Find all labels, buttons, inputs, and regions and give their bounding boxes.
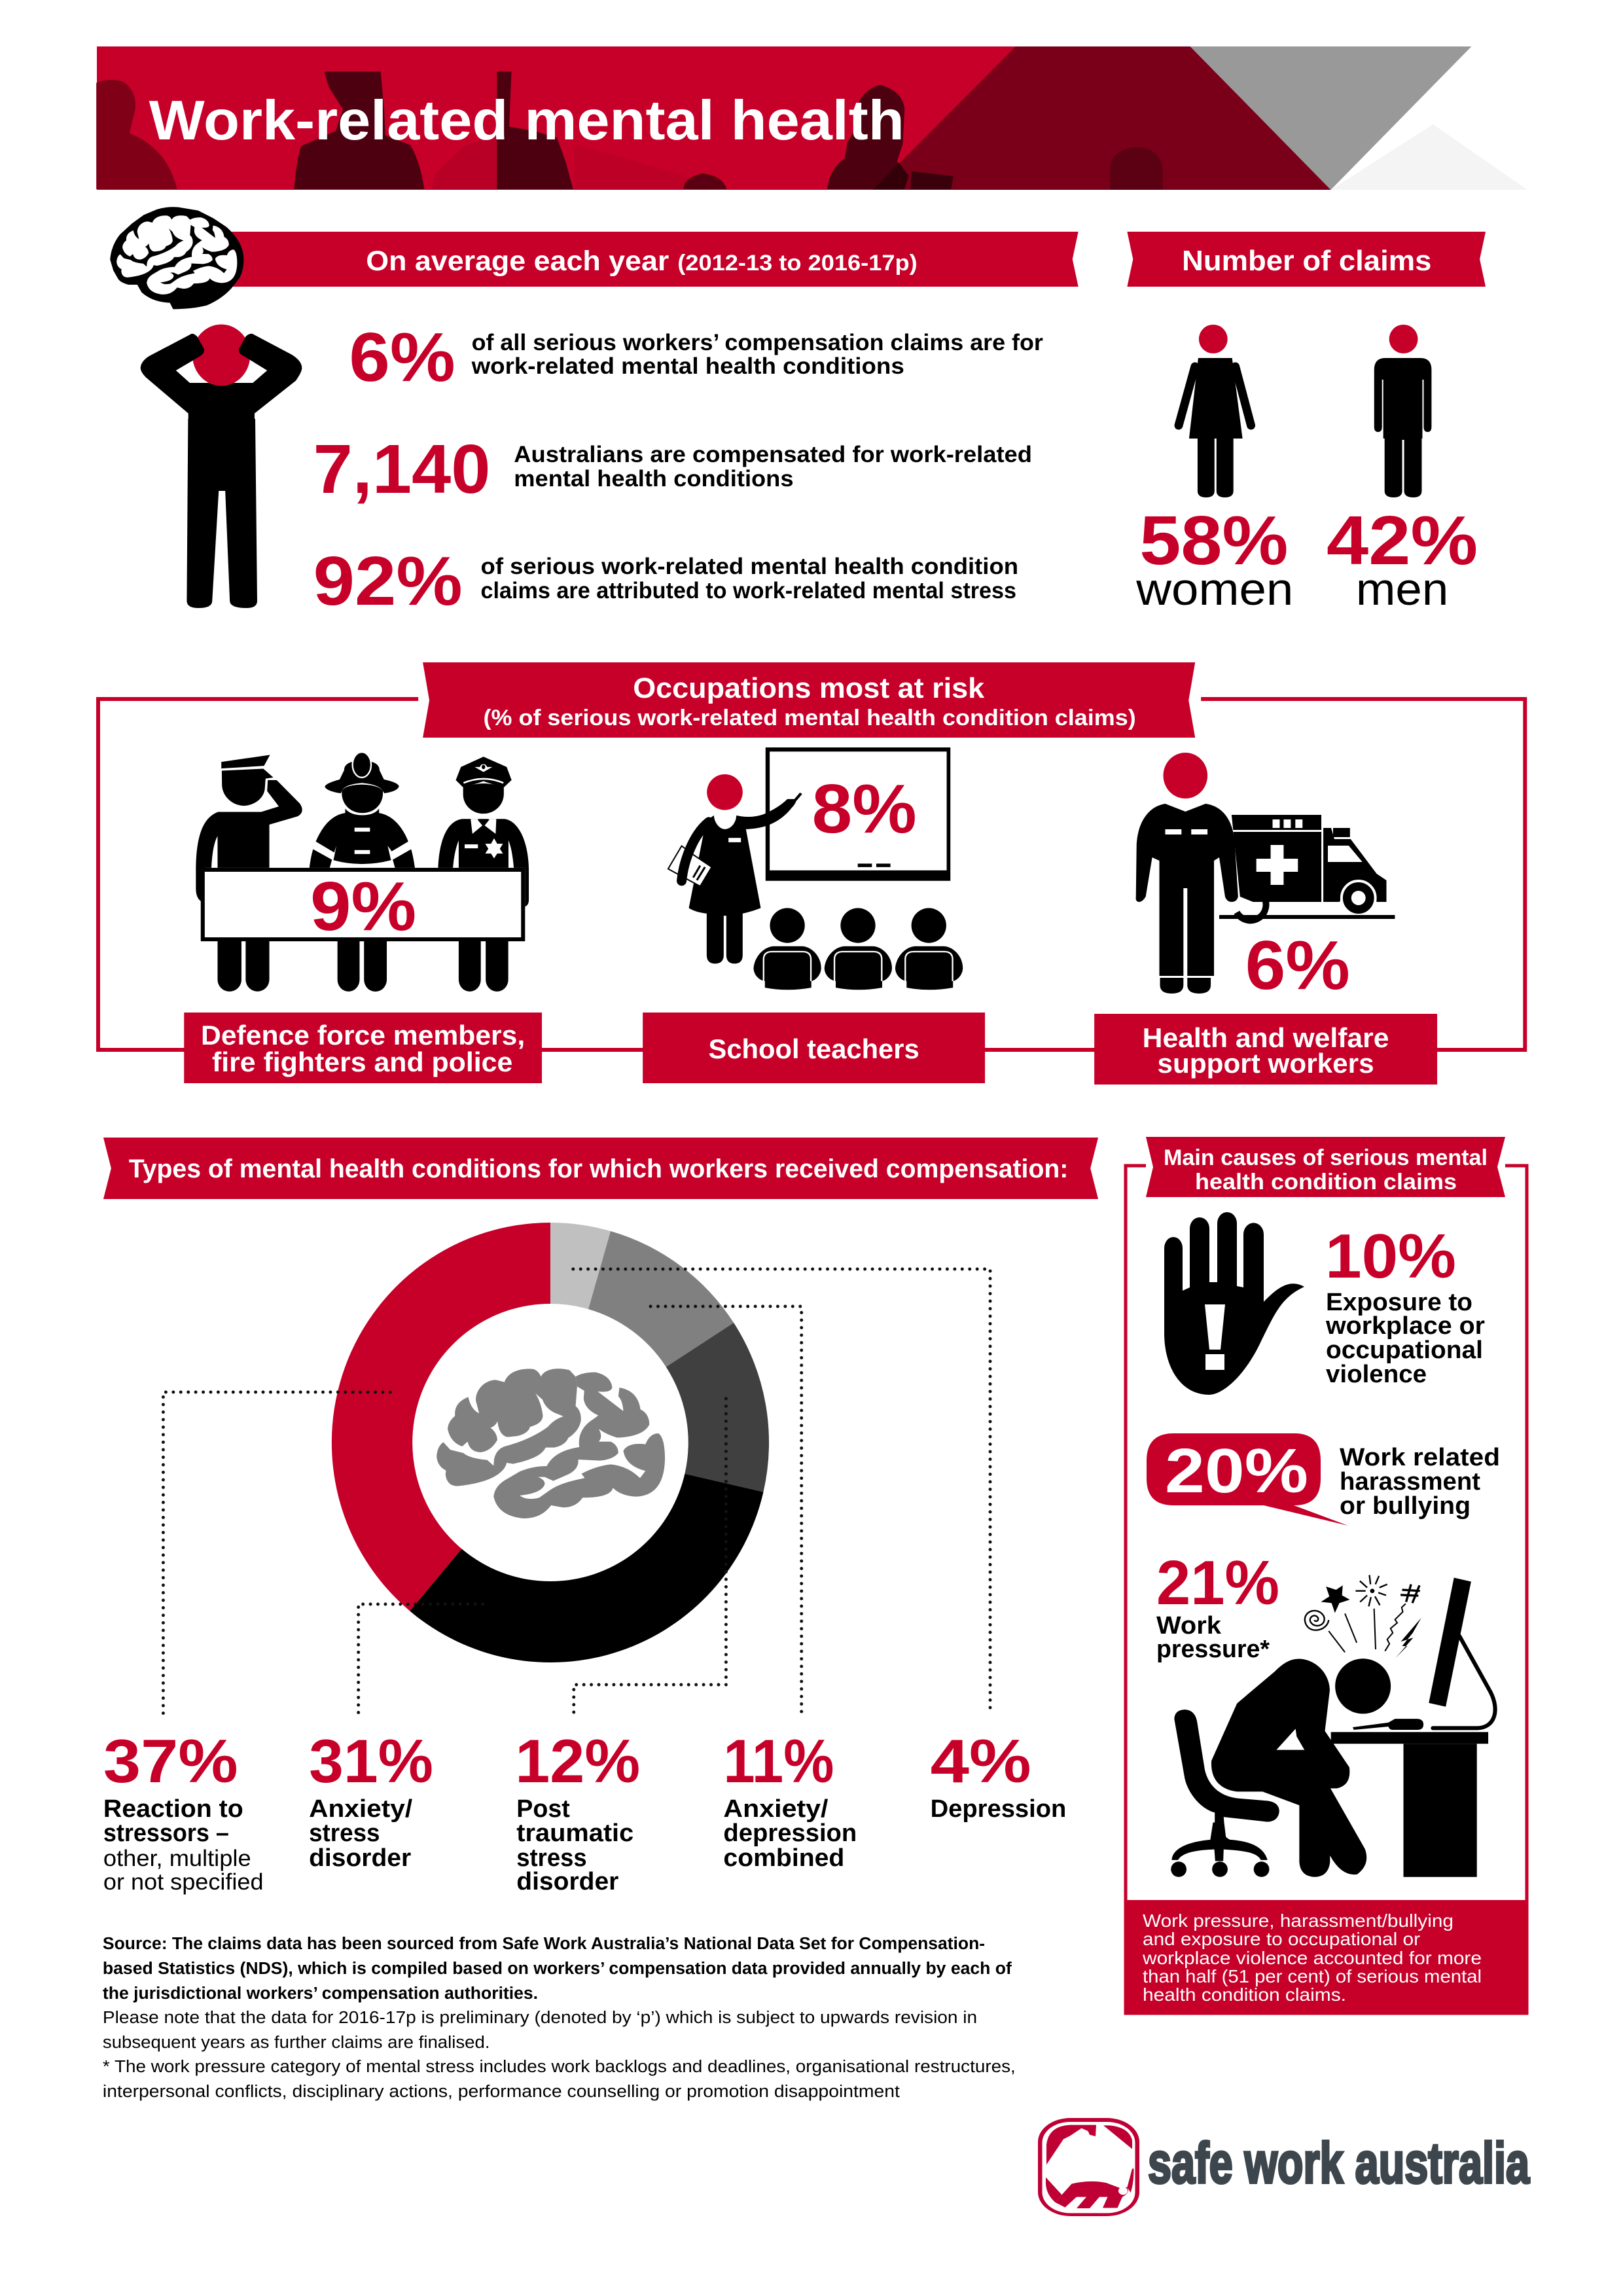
stat: 4% depression xyxy=(931,1727,1066,1823)
stat: 42% men: 42% xyxy=(1327,502,1478,579)
panel: types of mental health conditions xyxy=(103,1138,1098,1895)
icon: soldier xyxy=(196,755,302,992)
stat: 6%: of all serious workers’ compensation claims are for xyxy=(472,330,1043,355)
desk xyxy=(1331,1732,1488,1877)
callout: summary box xyxy=(1126,1900,1527,2013)
title: Work-related mental health xyxy=(149,89,904,151)
stat: 58% women: women xyxy=(1135,564,1293,615)
label: school teachers: School teachers xyxy=(709,1033,919,1064)
stat: 10% violence: workplace or xyxy=(1325,1312,1485,1340)
logo mark xyxy=(1038,2118,1139,2216)
callout: 20% speech bubble xyxy=(1147,1433,1348,1526)
icon: police officer xyxy=(438,757,529,992)
stat: 92%: of serious work-related mental health condition xyxy=(481,554,1018,579)
panel: on average each year xyxy=(110,207,1079,620)
label: health and welfare: Health and welfare xyxy=(1143,1022,1389,1053)
banner silhouettes xyxy=(96,71,954,189)
stat: 11% anxiety/depression combined: depression xyxy=(723,1820,857,1847)
text block: source and notes: the jurisdictional workers’ compensation authorities. xyxy=(103,1984,538,2003)
ribbon heading: occupations: Occupations most at risk xyxy=(633,672,985,704)
label: health and welfare: support workers xyxy=(1158,1048,1374,1079)
icon: ambulance xyxy=(1219,815,1395,920)
label: defence force: Defence force members, xyxy=(201,1020,525,1050)
text block: source and notes: based Statistics (NDS), which is compiled based on workers’ compensation data provided annually by each of xyxy=(103,1960,1012,1978)
stat: 37% reaction to stressors: or not specified xyxy=(103,1869,264,1895)
label: health and welfare xyxy=(1094,1014,1437,1085)
stat: 7,140: Australians are compensated for work-related xyxy=(514,442,1032,467)
banner xyxy=(96,46,1527,190)
stat: 6%: 6% xyxy=(349,319,455,396)
stat: 37% reaction to stressors: 37% xyxy=(103,1727,238,1795)
text block: source and notes: interpersonal conflicts, disciplinary actions, performance counselling or promotion disappointment xyxy=(103,2083,901,2101)
stat: 21% work pressure: Work xyxy=(1156,1612,1222,1640)
stat: 12% post traumatic stress disorder: Post xyxy=(516,1795,570,1823)
ribbon heading: types: Types of mental health conditions for which workers received compensation: xyxy=(129,1155,1068,1183)
stat: 11% anxiety/depression combined: Anxiety/ xyxy=(723,1795,829,1823)
label: defence force xyxy=(184,1013,542,1083)
icon: stressed person holding head xyxy=(141,325,302,608)
illustration: slumped worker at desk xyxy=(1171,1575,1495,1877)
panel: main causes xyxy=(1126,1137,1527,2013)
stat: 6% health: 6% xyxy=(1245,927,1350,1004)
icon: head and body xyxy=(1211,1659,1391,1877)
computer xyxy=(1353,1577,1495,1730)
ribbon heading: on average: (2012-13 to 2016-17p) xyxy=(677,251,918,276)
callout: summary box: than half (51 per cent) of serious mental xyxy=(1143,1966,1482,1986)
illustration: school teacher xyxy=(668,747,963,990)
icon: office chair xyxy=(1171,1710,1279,1877)
stat: 4% depression: Depression xyxy=(931,1795,1066,1823)
stat: 6% xyxy=(349,319,1043,396)
icon: grey brain xyxy=(437,1369,665,1518)
text block: source and notes: Please note that the data for 2016-17p is preliminary (denoted by ‘p’) which is subject to upwards revision in xyxy=(103,2009,977,2027)
sign xyxy=(203,870,523,939)
ribbon heading: main causes: Main causes of serious mental xyxy=(1164,1145,1488,1170)
stat: 11% anxiety/depression combined xyxy=(723,1727,857,1872)
callout: summary box: Work pressure, harassment/bullying xyxy=(1143,1910,1454,1931)
stat: 58% women: 58% xyxy=(1139,502,1288,579)
stat: 31% anxiety/stress disorder: stress xyxy=(309,1820,380,1847)
logo: safe work australia xyxy=(1038,2118,1530,2216)
text block: source and notes: * The work pressure category of mental stress includes work backlogs and deadlines, organisational restructures, xyxy=(103,2058,1016,2076)
ribbon heading: main causes xyxy=(1146,1137,1505,1197)
illustration: health worker and ambulance xyxy=(1136,753,1395,1004)
stat: 11% anxiety/depression combined: combined xyxy=(723,1844,844,1872)
text: harassment xyxy=(1340,1444,1500,1520)
ribbon heading: number of claims xyxy=(1127,232,1486,287)
stat: 92%: claims are attributed to work-related mental stress xyxy=(481,578,1016,603)
icon: warning hand xyxy=(1164,1212,1304,1395)
stat: 4% depression: 4% xyxy=(931,1727,1031,1795)
stat: 12% post traumatic stress disorder: disorder xyxy=(516,1868,619,1895)
icon: whiteboard xyxy=(766,747,950,881)
stat: 12% post traumatic stress disorder xyxy=(515,1727,640,1895)
ribbon heading: main causes: health condition claims xyxy=(1195,1170,1457,1194)
ribbon heading: number of claims: Number of claims xyxy=(1182,245,1431,277)
stat: 21% work pressure: 21% xyxy=(1156,1548,1279,1618)
stat: 92%: 92% xyxy=(313,543,463,620)
stat: 31% anxiety/stress disorder: disorder xyxy=(309,1844,411,1872)
stat: 42% men xyxy=(1327,502,1478,615)
label: defence force: fire fighters and police xyxy=(212,1047,512,1077)
icon: fire fighter xyxy=(310,752,415,992)
stat: 37% reaction to stressors xyxy=(103,1727,264,1895)
stat: 7,140: mental health conditions xyxy=(514,466,794,492)
icon: students xyxy=(753,908,963,990)
icon: woman xyxy=(1179,325,1251,497)
illustration: defence, fire and police xyxy=(196,752,529,992)
stat: 12% post traumatic stress disorder: 12% xyxy=(515,1727,640,1795)
panel: number of claims xyxy=(1127,232,1486,615)
stat: 37% reaction to stressors: Reaction to xyxy=(103,1795,243,1823)
stat: 92% xyxy=(313,543,1018,620)
icon: teacher xyxy=(668,774,802,963)
stat: 9%: 9% xyxy=(310,868,416,945)
ribbon heading: on average: On average each year xyxy=(366,245,669,277)
label: school teachers xyxy=(643,1013,985,1083)
stat: 37% reaction to stressors: stressors – xyxy=(103,1820,229,1847)
panel: occupations most at risk xyxy=(98,662,1525,1085)
callout: summary box: health condition claims. xyxy=(1143,1984,1346,2005)
text block: source and notes: subsequent years as further claims are finalised. xyxy=(103,2034,490,2052)
stat: 12% post traumatic stress disorder: stress xyxy=(516,1844,587,1872)
ribbon heading: occupations: (% of serious work-related mental health condition claims) xyxy=(484,706,1136,730)
stat: 37% reaction to stressors: other, multiple xyxy=(103,1846,251,1871)
ribbon heading: on average xyxy=(215,232,1079,287)
callout: 20% speech bubble: 20% xyxy=(1165,1436,1308,1506)
stat: 31% anxiety/stress disorder xyxy=(309,1727,433,1872)
text block: source and notes: Source: The claims data has been sourced from Safe Work Australia’s National Data Set for Compensation- xyxy=(103,1935,985,1953)
stat: 21% work pressure: pressure* xyxy=(1156,1636,1270,1663)
dotted leader lines xyxy=(163,1269,990,1714)
stat: 31% anxiety/stress disorder: 31% xyxy=(309,1727,433,1795)
icon: brain xyxy=(110,207,243,309)
stat: 11% anxiety/depression combined: 11% xyxy=(723,1727,834,1795)
callout: summary box: workplace violence accounted for more xyxy=(1142,1948,1482,1968)
text: harassment: harassment xyxy=(1340,1468,1480,1496)
stat: 7,140 xyxy=(313,431,1032,508)
stat: 21% work pressure xyxy=(1156,1548,1279,1663)
stat: 10% violence xyxy=(1325,1221,1485,1388)
ribbon heading: types xyxy=(103,1138,1098,1199)
stat: 42% men: men xyxy=(1356,564,1448,615)
text: harassment: Work related xyxy=(1340,1444,1500,1471)
stat: 6%: work-related mental health conditions xyxy=(471,353,904,379)
icon: man xyxy=(1374,325,1431,497)
icon: health worker xyxy=(1136,753,1238,994)
ribbon heading: occupations xyxy=(423,662,1195,738)
stat: 10% violence: Exposure to xyxy=(1326,1289,1472,1316)
icon: stress symbols xyxy=(1305,1575,1421,1658)
stat: 31% anxiety/stress disorder: Anxiety/ xyxy=(309,1795,413,1823)
stat: 8%: 8% xyxy=(812,770,917,848)
stat: 10% violence: 10% xyxy=(1325,1221,1456,1291)
stat: 7,140: 7,140 xyxy=(313,431,490,508)
text block: source and notes xyxy=(103,1935,1016,2101)
text: harassment: or bullying xyxy=(1340,1492,1471,1520)
stat: 10% violence: occupational xyxy=(1326,1336,1483,1364)
stat: 58% women xyxy=(1135,502,1293,615)
callout: summary box: and exposure to occupational or xyxy=(1143,1929,1420,1949)
stat: 10% violence: violence xyxy=(1326,1361,1427,1388)
stat: 12% post traumatic stress disorder: traumatic xyxy=(516,1820,633,1847)
donut chart xyxy=(332,1223,769,1662)
